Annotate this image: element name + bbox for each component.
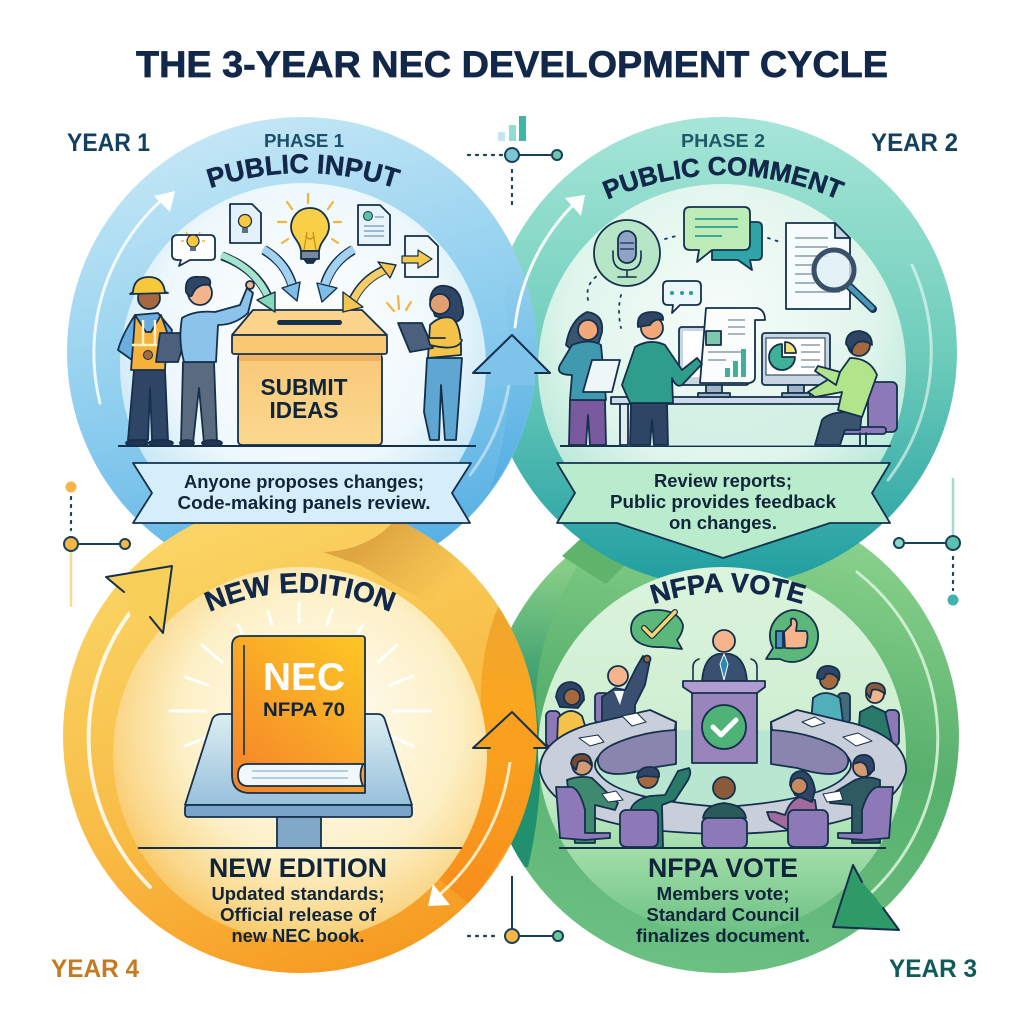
ribbon caption bbox=[557, 463, 890, 558]
ballot box bbox=[232, 310, 387, 445]
caption bbox=[209, 853, 387, 946]
year labels bbox=[51, 129, 977, 983]
standing woman with notepad bbox=[559, 312, 620, 445]
person pointing up bbox=[180, 277, 254, 446]
icon: main light bulb bbox=[278, 194, 341, 263]
caption: finalizes document. bbox=[636, 926, 810, 946]
arrowhead: green to year 3 bbox=[833, 865, 899, 930]
icon: report document bbox=[358, 205, 390, 245]
monitor with report bbox=[679, 308, 765, 397]
ribbon caption: on changes. bbox=[669, 513, 777, 533]
arrowhead: orange into nfpa vote bbox=[473, 712, 548, 762]
caption: Members vote; bbox=[656, 884, 790, 904]
ribbon caption: Public provides feedback bbox=[610, 492, 837, 512]
seated man at computer bbox=[808, 331, 897, 445]
ground line bbox=[118, 445, 476, 447]
woman with tablet bbox=[387, 286, 463, 440]
floor circle bbox=[598, 728, 848, 812]
year labels: YEAR 4 bbox=[51, 955, 139, 983]
caption: Official release of bbox=[220, 905, 377, 925]
arrowhead: blue into phase 2 bbox=[473, 335, 550, 385]
book stand bbox=[185, 714, 412, 848]
front right members bbox=[767, 755, 893, 847]
monitor with pie chart bbox=[762, 333, 830, 397]
ground line bbox=[138, 847, 462, 849]
icon: microphone bbox=[594, 220, 660, 286]
ribbon caption: Code-making panels review. bbox=[178, 493, 430, 513]
icon: document with bulb bbox=[230, 204, 261, 243]
year labels: YEAR 1 bbox=[67, 129, 150, 157]
ribbon caption bbox=[133, 463, 471, 523]
dotted links bbox=[587, 236, 780, 328]
curved heading: public input: PUBLIC INPUT bbox=[206, 154, 402, 188]
icon: idea speech bubble bbox=[172, 232, 215, 266]
caption: new NEC book. bbox=[232, 926, 364, 946]
arrows into ballot box bbox=[221, 249, 396, 312]
back right members bbox=[811, 666, 899, 746]
caption bbox=[636, 853, 810, 946]
icon: check bubble bbox=[631, 610, 683, 649]
worker in hard hat bbox=[118, 277, 187, 446]
icon: document with arrow bbox=[402, 236, 438, 277]
ring flow arrows bbox=[89, 191, 938, 906]
icon: document with magnifier bbox=[786, 223, 873, 309]
ballot box: IDEAS bbox=[270, 397, 338, 423]
NEC book bbox=[232, 636, 365, 793]
phase 1 label: PHASE 1 bbox=[264, 131, 344, 151]
curved heading: nfpa vote: NFPA VOTE bbox=[650, 573, 806, 604]
panel: nfpa vote bbox=[539, 573, 907, 946]
overlapping cycle discs bbox=[63, 117, 959, 973]
arrowhead: gold top left bbox=[106, 566, 172, 633]
caption: Updated standards; bbox=[212, 884, 384, 904]
decorative connector nodes bbox=[64, 116, 960, 943]
caption: Standard Council bbox=[646, 905, 800, 925]
phase 2 label: PHASE 2 bbox=[681, 131, 765, 151]
ballot box: SUBMIT bbox=[260, 374, 348, 400]
glowing rays bbox=[170, 603, 430, 746]
back left members bbox=[546, 656, 650, 747]
caption: NFPA VOTE bbox=[648, 853, 798, 883]
icon: typing bubble bbox=[663, 281, 701, 313]
ground line bbox=[559, 847, 886, 849]
curved heading: new edition: NEW EDITION bbox=[204, 572, 396, 612]
desk bbox=[611, 397, 851, 446]
ribbon caption: Review reports; bbox=[654, 471, 792, 491]
podium with speaker bbox=[683, 630, 765, 763]
NEC book: NFPA 70 bbox=[263, 700, 345, 721]
curved heading: public comment: PUBLIC COMMENT bbox=[602, 156, 846, 200]
panel: new edition bbox=[138, 572, 462, 946]
icon: speech bubbles bbox=[684, 207, 762, 270]
front centre member bbox=[702, 777, 747, 848]
ground line bbox=[560, 445, 891, 447]
year labels: YEAR 2 bbox=[871, 129, 958, 157]
year labels: YEAR 3 bbox=[889, 955, 977, 983]
NEC book: NEC bbox=[263, 656, 345, 699]
panel: public input bbox=[117, 131, 476, 524]
front left members bbox=[556, 754, 690, 848]
title: THE 3-YEAR NEC DEVELOPMENT CYCLE bbox=[136, 44, 888, 85]
curved council table bbox=[540, 710, 906, 834]
ribbon caption: Anyone proposes changes; bbox=[184, 472, 424, 492]
icon: thumbs up bubble bbox=[766, 610, 818, 662]
panel: public comment bbox=[556, 131, 898, 559]
caption: NEW EDITION bbox=[209, 853, 387, 883]
standing man gesturing bbox=[622, 312, 702, 445]
